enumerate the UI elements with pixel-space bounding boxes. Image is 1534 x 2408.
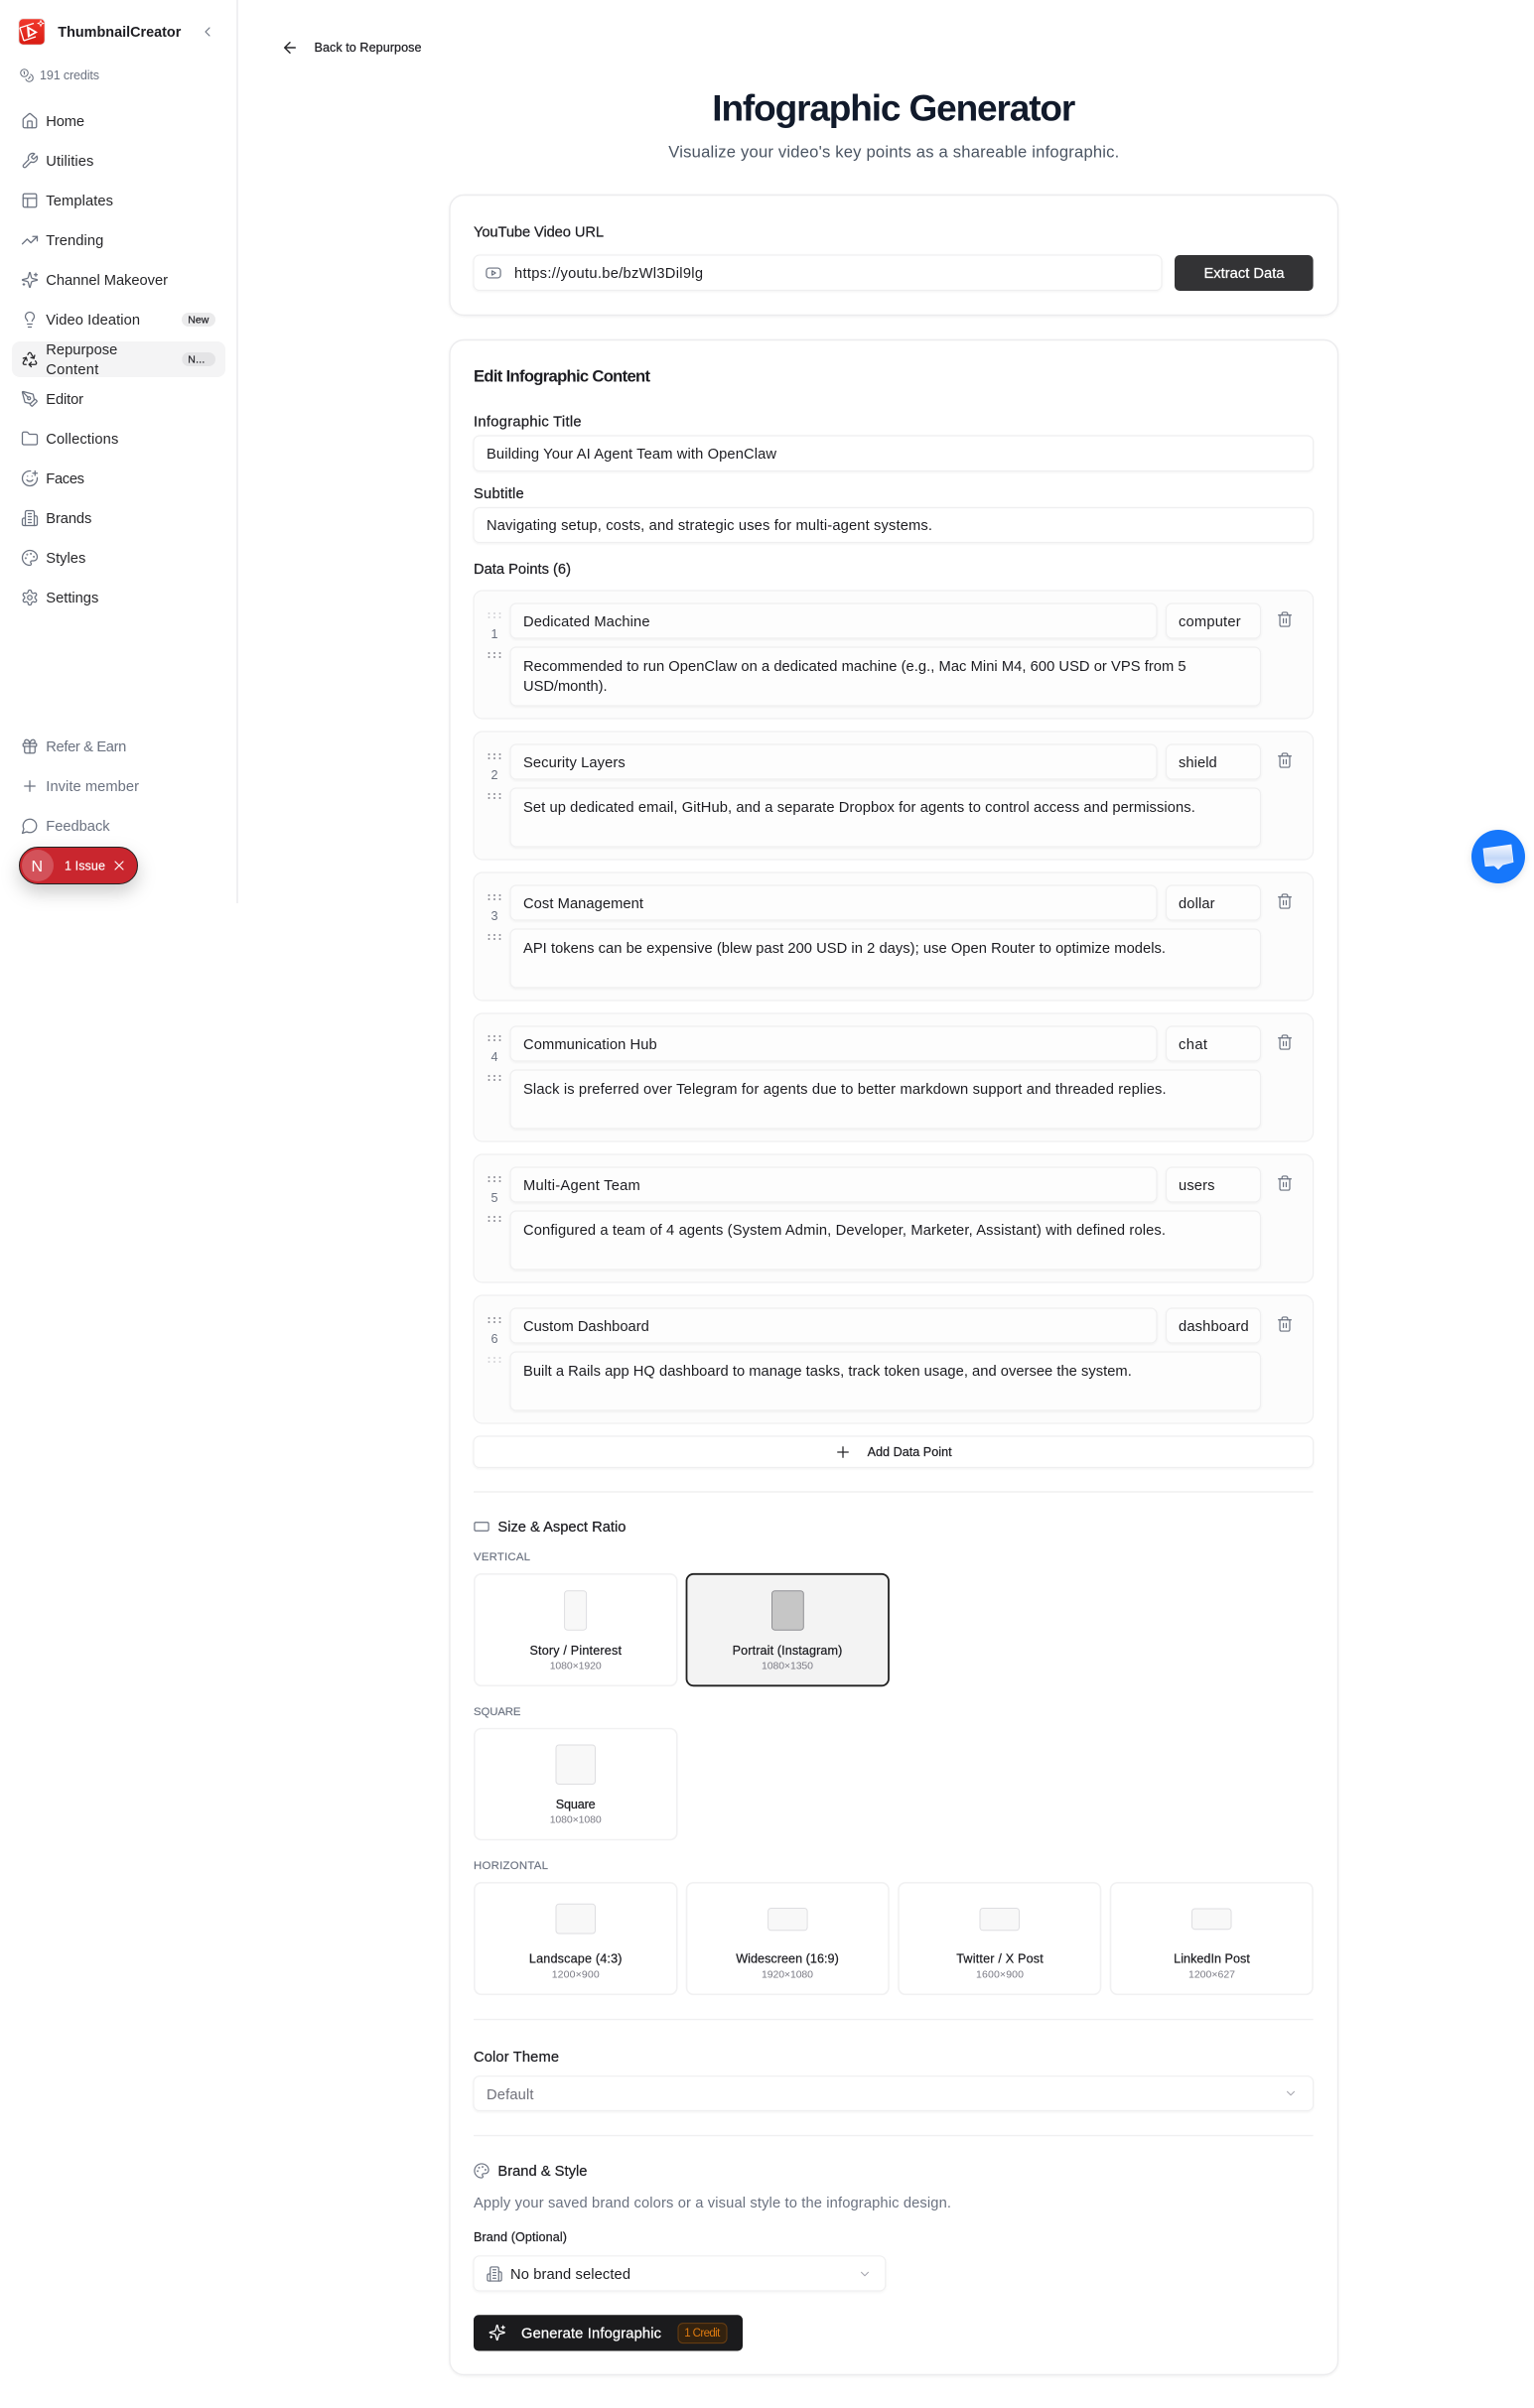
nav item: Utilities: Utilities [46, 154, 93, 170]
data point 1: Dedicated Machine [523, 614, 649, 630]
size option: Landscape: Landscape (4:3) [529, 1951, 622, 1965]
brand select: No brand selected [510, 2267, 630, 2283]
data point 5: 5 [490, 1191, 498, 1205]
data point 2: shield [1179, 755, 1217, 771]
page subtitle: Visualize your video's key points as a shareable infographic. [668, 143, 1119, 161]
data point 3 [474, 872, 1314, 1001]
nav item: Utilities [23, 153, 93, 170]
size option: LinkedIn Post: 1200×627 [1188, 1969, 1235, 1981]
label: Brand (Optional): Brand (Optional) [474, 2230, 567, 2244]
field: Color Theme: Color Theme [474, 2050, 559, 2066]
icon: collapse chevron [206, 28, 209, 36]
nav item: Invite member: Invite member [46, 779, 139, 795]
size option: Twitter / X Post: 1600×900 [976, 1969, 1024, 1981]
heading: Brand & Style: Brand & Style [497, 2164, 587, 2180]
button: Extract Data: Extract Data [1203, 266, 1285, 282]
data point 4: Communication Hub [523, 1037, 657, 1053]
size option: Story / Pinterest: Story / Pinterest [529, 1644, 622, 1658]
size option: Landscape: 1200×900 [552, 1969, 600, 1981]
size option: Story / Pinterest: 1080×1920 [550, 1660, 602, 1672]
size option: LinkedIn Post: LinkedIn Post [1174, 1951, 1250, 1965]
credits: 191 credits [40, 68, 99, 82]
nav item: Settings: Settings [46, 591, 98, 606]
nav item: Collections: Collections [46, 432, 118, 448]
data point 5: users [1179, 1178, 1215, 1194]
nav item: Feedback: Feedback [46, 819, 110, 835]
issue badge: 1 Issue [65, 859, 105, 872]
size option: Twitter / X Post [899, 1883, 1100, 1994]
size option: LinkedIn Post [1110, 1883, 1313, 1994]
field: Infographic Title [474, 415, 1314, 470]
data point 1: 1 [490, 627, 498, 641]
label: YouTube Video URL: YouTube Video URL [474, 224, 604, 240]
nav item: Faces: Faces [46, 471, 84, 487]
field: Color Theme: Default [487, 2087, 534, 2103]
data point 1: Recommended to run OpenClaw on a dedicated machine (e.g., Mac Mini M4, 600 USD or VPS from 5 [523, 659, 1186, 675]
field: Subtitle: Navigating setup, costs, and strategic uses for multi-agent systems. [487, 518, 932, 534]
data point 5 [474, 1154, 1314, 1282]
data point 4: Slack is preferred over Telegram for agents due to better markdown support and threaded replies. [523, 1082, 1167, 1098]
nav item: Home [23, 114, 84, 130]
nav item: Video Ideation [26, 312, 215, 329]
data point 2: 2 [490, 768, 498, 782]
heading: Edit Infographic Content [474, 367, 650, 385]
data point 5: Multi-Agent Team [523, 1178, 640, 1194]
size option: Portrait (selected): 1080×1350 [762, 1660, 813, 1672]
panel: YouTube URL [450, 195, 1338, 316]
nav item: Editor: Editor [46, 392, 83, 408]
data point 6: dashboard [1179, 1319, 1249, 1335]
data point 5: Configured a team of 4 agents (System Admin, Developer, Marketer, Assistant) with defined roles. [523, 1223, 1166, 1239]
size option: Square [475, 1729, 677, 1840]
size option: Widescreen: Widescreen (16:9) [736, 1951, 839, 1965]
data point 4: chat [1179, 1037, 1207, 1053]
nav item: Editor [22, 391, 83, 408]
data point 3: API tokens can be expensive (blew past 200 USD in 2 days); use Open Router to optimize models. [523, 941, 1166, 957]
size option: Twitter / X Post: Twitter / X Post [956, 1951, 1044, 1965]
field: Infographic Title: Infographic Title [474, 415, 582, 431]
nav item: Brands: Brands [46, 511, 91, 527]
data point 1: USD/month). [523, 679, 608, 695]
data point 2: Set up dedicated email, GitHub, and a separate Dropbox for agents to control access and permissions. [523, 800, 1195, 816]
size option: Portrait (selected): Portrait (Instagram) [733, 1644, 842, 1658]
field: Subtitle: Subtitle [474, 486, 524, 502]
nav item: Brands [22, 510, 91, 527]
credit badge: 1 Credit [684, 2328, 721, 2340]
nav item: Styles [22, 550, 85, 567]
button: Generate Infographic [474, 2315, 743, 2350]
size option: Portrait (selected) [687, 1574, 889, 1685]
nav item: Video Ideation: Video Ideation [46, 313, 140, 329]
size option: Landscape [475, 1883, 677, 1994]
nav item: Templates: Templates [46, 194, 113, 209]
label: SQUARE: SQUARE [474, 1706, 521, 1718]
page title: Infographic Generator [712, 88, 1075, 129]
nav item: Repurpose Content (selected): N... [188, 353, 205, 365]
nav item: Repurpose Content (selected): Content [46, 362, 98, 378]
nav item: Styles: Styles [46, 551, 85, 567]
issue badge: N [32, 859, 43, 875]
icon: chat bubble [1483, 845, 1513, 870]
brand name: ThumbnailCreator [58, 25, 182, 41]
nav item: Faces [23, 470, 84, 487]
size option: Story / Pinterest [475, 1574, 677, 1685]
nav item: Repurpose Content (selected): Repurpose [46, 342, 117, 358]
logo icon [19, 19, 45, 45]
size option: Square: 1080×1080 [550, 1814, 602, 1826]
label: VERTICAL: VERTICAL [474, 1551, 530, 1563]
nav item: Refer & Earn: Refer & Earn [46, 739, 126, 755]
size option: Square: Square [556, 1798, 596, 1811]
URL input: https://youtu.be/bzWl3Dil9lg [514, 266, 703, 282]
data point 6: 6 [490, 1332, 498, 1346]
data point 6 [474, 1295, 1314, 1423]
button: Generate Infographic: Generate Infographic [521, 2327, 661, 2342]
size option: Widescreen: 1920×1080 [762, 1969, 813, 1981]
URL input [474, 255, 1162, 290]
panel: Edit Infographic Content [450, 339, 1338, 2374]
issue badge [20, 848, 137, 883]
data point 4 [474, 1013, 1314, 1141]
button: Extract Data [1175, 255, 1314, 291]
data point 3: 3 [490, 909, 498, 923]
data point 4: 4 [490, 1050, 498, 1064]
label: HORIZONTAL: HORIZONTAL [474, 1860, 548, 1872]
panel: sidebar [12, 0, 237, 903]
field: Subtitle [474, 486, 1314, 542]
nav item: Home: Home [46, 114, 84, 130]
floating chat button [1471, 830, 1525, 883]
field: Color Theme [474, 2050, 1314, 2110]
credit badge [678, 2324, 727, 2343]
label: Data Points: Data Points (6) [474, 562, 571, 578]
data point 2: Security Layers [523, 755, 626, 771]
data point 3: Cost Management [523, 896, 643, 912]
brand select [474, 2256, 886, 2291]
data point 6: Custom Dashboard [523, 1319, 649, 1335]
nav item: Repurpose Content (selected) [12, 341, 225, 378]
button: Add Data Point [474, 1436, 1314, 1467]
button: Add Data Point: Add Data Point [868, 1445, 952, 1459]
data point 1: computer [1179, 614, 1241, 630]
field: Infographic Title: Building Your AI Agent Team with OpenClaw [487, 447, 776, 463]
back link: Back to Repurpose [314, 41, 421, 55]
size option: Widescreen [687, 1883, 889, 1994]
data point 6: Built a Rails app HQ dashboard to manage tasks, track token usage, and oversee the system. [523, 1364, 1132, 1380]
nav item: Settings [23, 590, 98, 606]
nav item: Video Ideation: New [188, 314, 209, 326]
brand description: Apply your saved brand colors or a visual style to the infographic design. [474, 2196, 951, 2211]
nav item: Channel Makeover: Channel Makeover [46, 273, 168, 289]
data point 1 [474, 591, 1314, 719]
heading: Size & Aspect Ratio: Size & Aspect Ratio [497, 1520, 626, 1536]
nav item: Trending: Trending [46, 233, 103, 249]
data point 2 [474, 732, 1314, 860]
data point 3: dollar [1179, 896, 1215, 912]
